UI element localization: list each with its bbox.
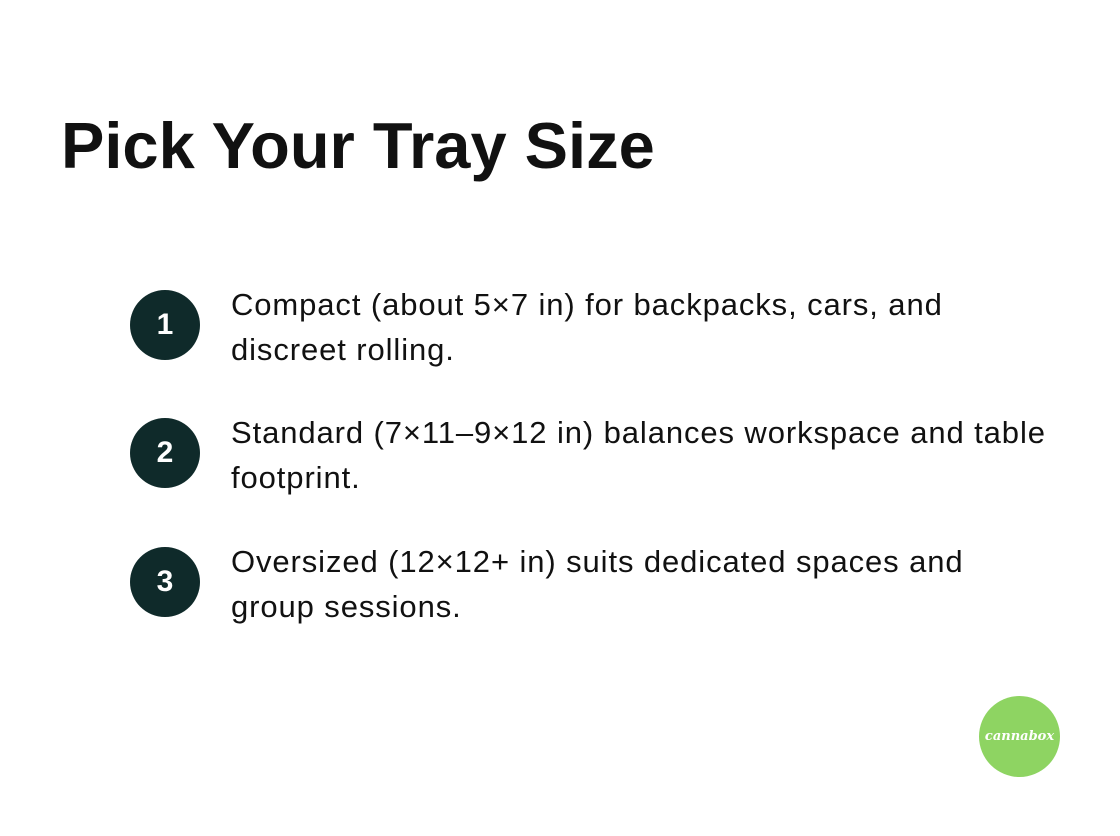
text 1: Compact (about 5×7 in) for backpacks, cars, and <box>231 287 943 322</box>
number badge 1: 1 <box>157 308 173 341</box>
text 2: Standard (7×11–9×12 in) balances workspace and table <box>231 415 1046 450</box>
text 1: discreet rolling. <box>231 332 455 367</box>
item 3 <box>130 544 964 624</box>
text 2 <box>231 415 1046 495</box>
item 2 <box>130 415 1046 495</box>
logo: cannabox: cannabox <box>985 729 1054 744</box>
item 1 <box>130 287 943 367</box>
text 3: Oversized (12×12+ in) suits dedicated spaces and <box>231 544 964 579</box>
logo: cannabox <box>979 696 1060 777</box>
text 3: group sessions. <box>231 589 462 624</box>
text 3 <box>231 544 964 624</box>
number badge 3 <box>130 547 200 617</box>
number badge 1 <box>130 290 200 360</box>
text 1 <box>231 287 943 367</box>
number badge 3: 3 <box>157 565 173 598</box>
number badge 2: 2 <box>157 436 173 469</box>
number badge 2 <box>130 418 200 488</box>
title: Pick Your Tray Size <box>61 109 655 182</box>
text 2: footprint. <box>231 460 361 495</box>
